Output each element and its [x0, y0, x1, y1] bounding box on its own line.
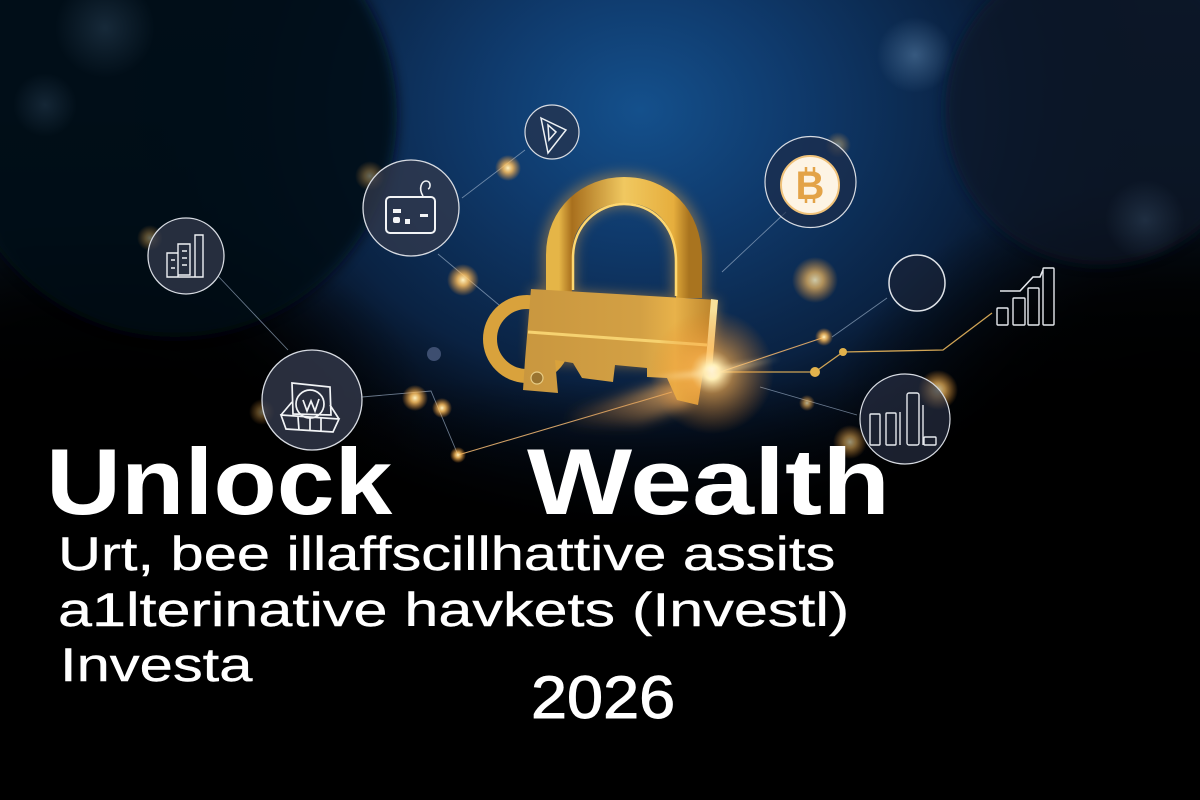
flare [650, 310, 774, 434]
rivet [531, 372, 543, 384]
subtitle line 2: a1lterinative havkets (Investl) [58, 583, 849, 636]
icon: basket emblem [262, 350, 362, 450]
body right edge [705, 299, 718, 372]
padlock [490, 190, 718, 405]
icon: bar chart circle [860, 374, 950, 464]
subtitle text block [58, 527, 849, 691]
body band line [528, 332, 707, 345]
light beam [565, 382, 690, 428]
glow dots [137, 132, 958, 463]
gold trend line [715, 313, 992, 372]
icon: empty circle [889, 255, 945, 311]
lock body [523, 289, 718, 405]
lock halo [530, 190, 718, 370]
icon: bar buildings [148, 218, 224, 294]
icon: credit card [363, 160, 459, 256]
icon: rising chart [997, 268, 1054, 325]
subtitle line 1: Urt, bee illaffscillhattive assits [58, 527, 835, 580]
icon: arrow triangle [525, 105, 579, 159]
network lines [218, 150, 887, 455]
subtitle line 3: Investa [60, 638, 252, 691]
title: Wealth: Wealth [527, 429, 890, 534]
gold link line [458, 337, 825, 455]
icon: bitcoin coin: B [796, 164, 824, 208]
side ring [490, 302, 564, 376]
title: Unlock: Unlock [46, 429, 392, 534]
icon: bitcoin coin [765, 136, 856, 228]
shackle [559, 190, 689, 298]
flare rays [650, 358, 780, 378]
year: 2026 [531, 664, 675, 731]
shackle inner highlight [573, 204, 676, 296]
